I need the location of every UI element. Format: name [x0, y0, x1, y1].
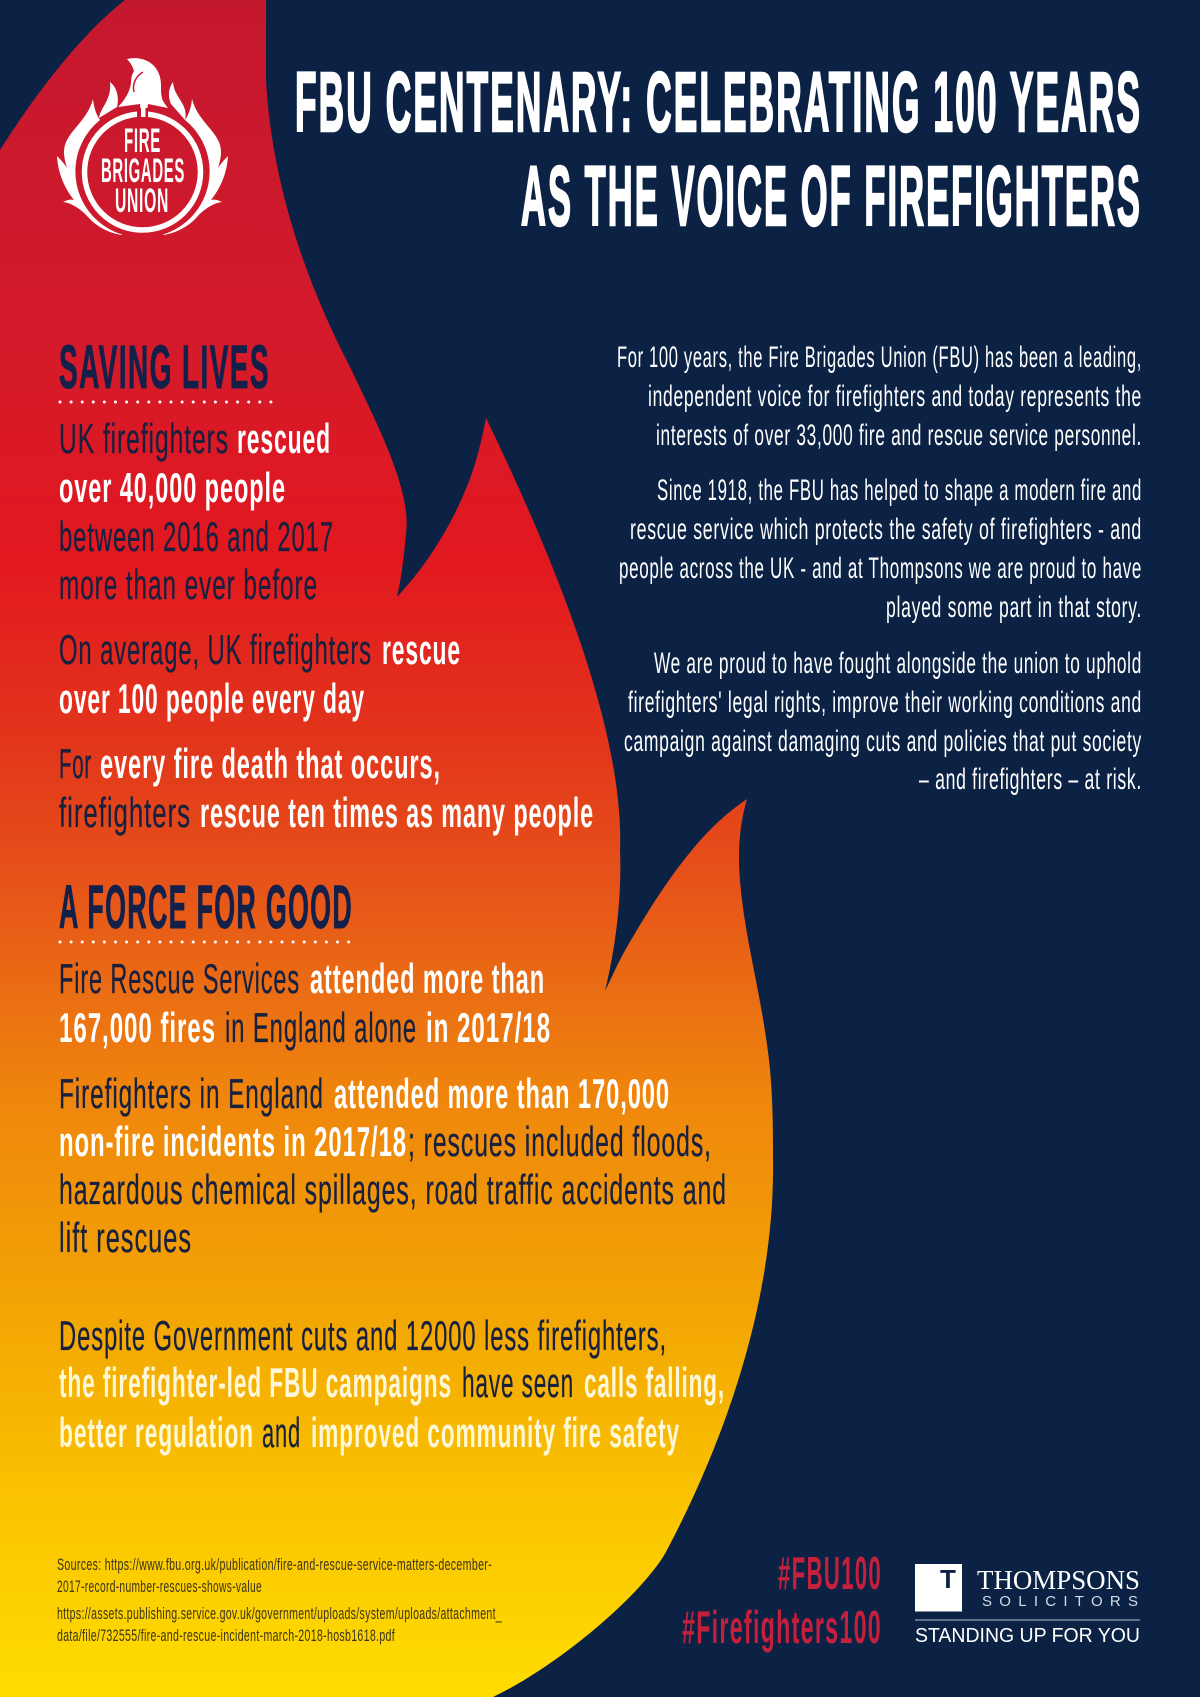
fact: 170,000 non-fire incidents — [59, 1070, 727, 1261]
fact: government cuts: have seen — [462, 1359, 574, 1406]
fact: ten times as many — [59, 740, 594, 836]
fact: 170,000 non-fire incidents: lift rescues — [59, 1214, 192, 1261]
logo small flame left — [99, 82, 118, 118]
fact: government cuts: better regulation — [59, 1409, 254, 1456]
fact: ten times as many: For — [59, 740, 92, 787]
panel: a force for good: A FORCE FOR GOOD — [59, 873, 353, 941]
logo wreath: left flames — [57, 99, 122, 235]
fact: rescued over 40,000: UK firefighters — [59, 415, 229, 462]
sources — [57, 1555, 502, 1645]
fact: government cuts: improved community fire safety — [311, 1409, 680, 1456]
panel: a force for good — [59, 873, 727, 1456]
fact: 167,000 fires: Fire Rescue Services — [59, 955, 300, 1002]
intro paragraph 2 — [619, 474, 1142, 624]
intro paragraph 3 — [624, 647, 1142, 796]
fact: government cuts: and — [262, 1409, 301, 1456]
fact: rescued over 40,000 — [59, 415, 334, 608]
fact: ten times as many: rescue ten times as many people — [200, 789, 594, 836]
logo ring — [84, 114, 200, 230]
Solicitors wordmark: SOLICITORS — [982, 1593, 1138, 1610]
fact: 100 people every day: rescue — [382, 626, 461, 673]
logo: Fire Brigades Union — [57, 58, 228, 235]
fact: 100 people every day: over 100 people every day — [59, 675, 365, 722]
fact: ten times as many: every fire death that occurs, — [100, 740, 441, 787]
sources: 2017-record-number-rescues-shows-value — [57, 1577, 262, 1596]
logo small flame right — [169, 82, 186, 120]
fact: rescued over 40,000: more than ever before — [59, 561, 318, 608]
fact: government cuts: the firefighter-led FBU campaigns — [59, 1359, 452, 1406]
sources: https://assets.publishing.service.gov.uk/government/uploads/system/uploads/attachment_ — [57, 1604, 502, 1623]
logo shaft — [141, 100, 146, 117]
logo wreath: right flames — [163, 99, 228, 235]
flame shape — [0, 0, 773, 1697]
logo: Fire Brigades Union: BRIGADES — [101, 152, 185, 190]
logo: Thompsons Solicitors — [915, 1564, 1140, 1647]
fact: ten times as many: firefighters — [59, 789, 191, 836]
panel: saving lives: SAVING LIVES — [59, 333, 270, 401]
logo text: UNION — [115, 182, 169, 220]
panel: saving lives — [59, 333, 594, 836]
fact: government cuts — [59, 1312, 725, 1456]
fact: 170,000 non-fire incidents: non-fire incidents in 2017/18 — [59, 1118, 407, 1165]
T box — [915, 1564, 962, 1612]
text: #FBU100 — [778, 1547, 882, 1599]
logo helmet — [118, 58, 168, 117]
hashtags — [682, 1547, 882, 1653]
dotted rule — [60, 400, 271, 404]
Thompsons wordmark: THOMPSONS — [977, 1565, 1140, 1595]
fact: 167,000 fires: in England alone — [225, 1004, 417, 1051]
fact: government cuts: calls falling, — [584, 1359, 725, 1406]
fact: rescued over 40,000: rescued — [237, 415, 331, 462]
logo helmet leaf — [133, 72, 143, 92]
fact: government cuts: Despite Government cuts and 12000 less firefighters, — [59, 1312, 667, 1359]
dotted rule — [60, 940, 354, 944]
fact: 167,000 fires — [59, 955, 551, 1051]
intro text — [617, 341, 1142, 796]
sources: Sources: https://www.fbu.org.uk/publication/fire-and-rescue-service-matters-december- — [57, 1555, 492, 1574]
logo text — [101, 122, 185, 220]
fact: rescued over 40,000: over 40,000 people — [59, 464, 286, 511]
fact: 170,000 non-fire incidents: hazardous chemical spillages, road traffic accidents and — [59, 1166, 727, 1213]
T glyph: T — [940, 1564, 956, 1594]
strapline: STANDING UP FOR YOU — [915, 1625, 1140, 1647]
Thompsons divider — [915, 1620, 1140, 1621]
fact: rescued over 40,000: between 2016 and 2017 — [59, 513, 334, 560]
fact: 100 people every day — [59, 626, 461, 722]
title — [295, 55, 1142, 243]
fact: 100 people every day: On average, UK firefighters — [59, 626, 372, 673]
sources: data/file/732555/fire-and-rescue-incident-march-2018-hosb1618.pdf — [57, 1626, 395, 1645]
fact: 167,000 fires: attended more than — [310, 955, 545, 1002]
logo text: FIRE — [124, 122, 161, 160]
fact: 170,000 non-fire incidents: Firefighters in England — [59, 1070, 324, 1117]
fact: 167,000 fires: in 2017/18 — [426, 1004, 551, 1051]
intro paragraph 1 — [617, 341, 1142, 452]
fact: 170,000 non-fire incidents: attended more than 170,000 — [334, 1070, 670, 1117]
fact: 167,000 fires: 167,000 fires — [59, 1004, 216, 1051]
fact: 170,000 non-fire incidents: ; rescues included floods, — [408, 1118, 712, 1165]
hashtag Firefighters100: #Firefighters100 — [682, 1601, 882, 1653]
logo ring gap — [137, 108, 148, 117]
